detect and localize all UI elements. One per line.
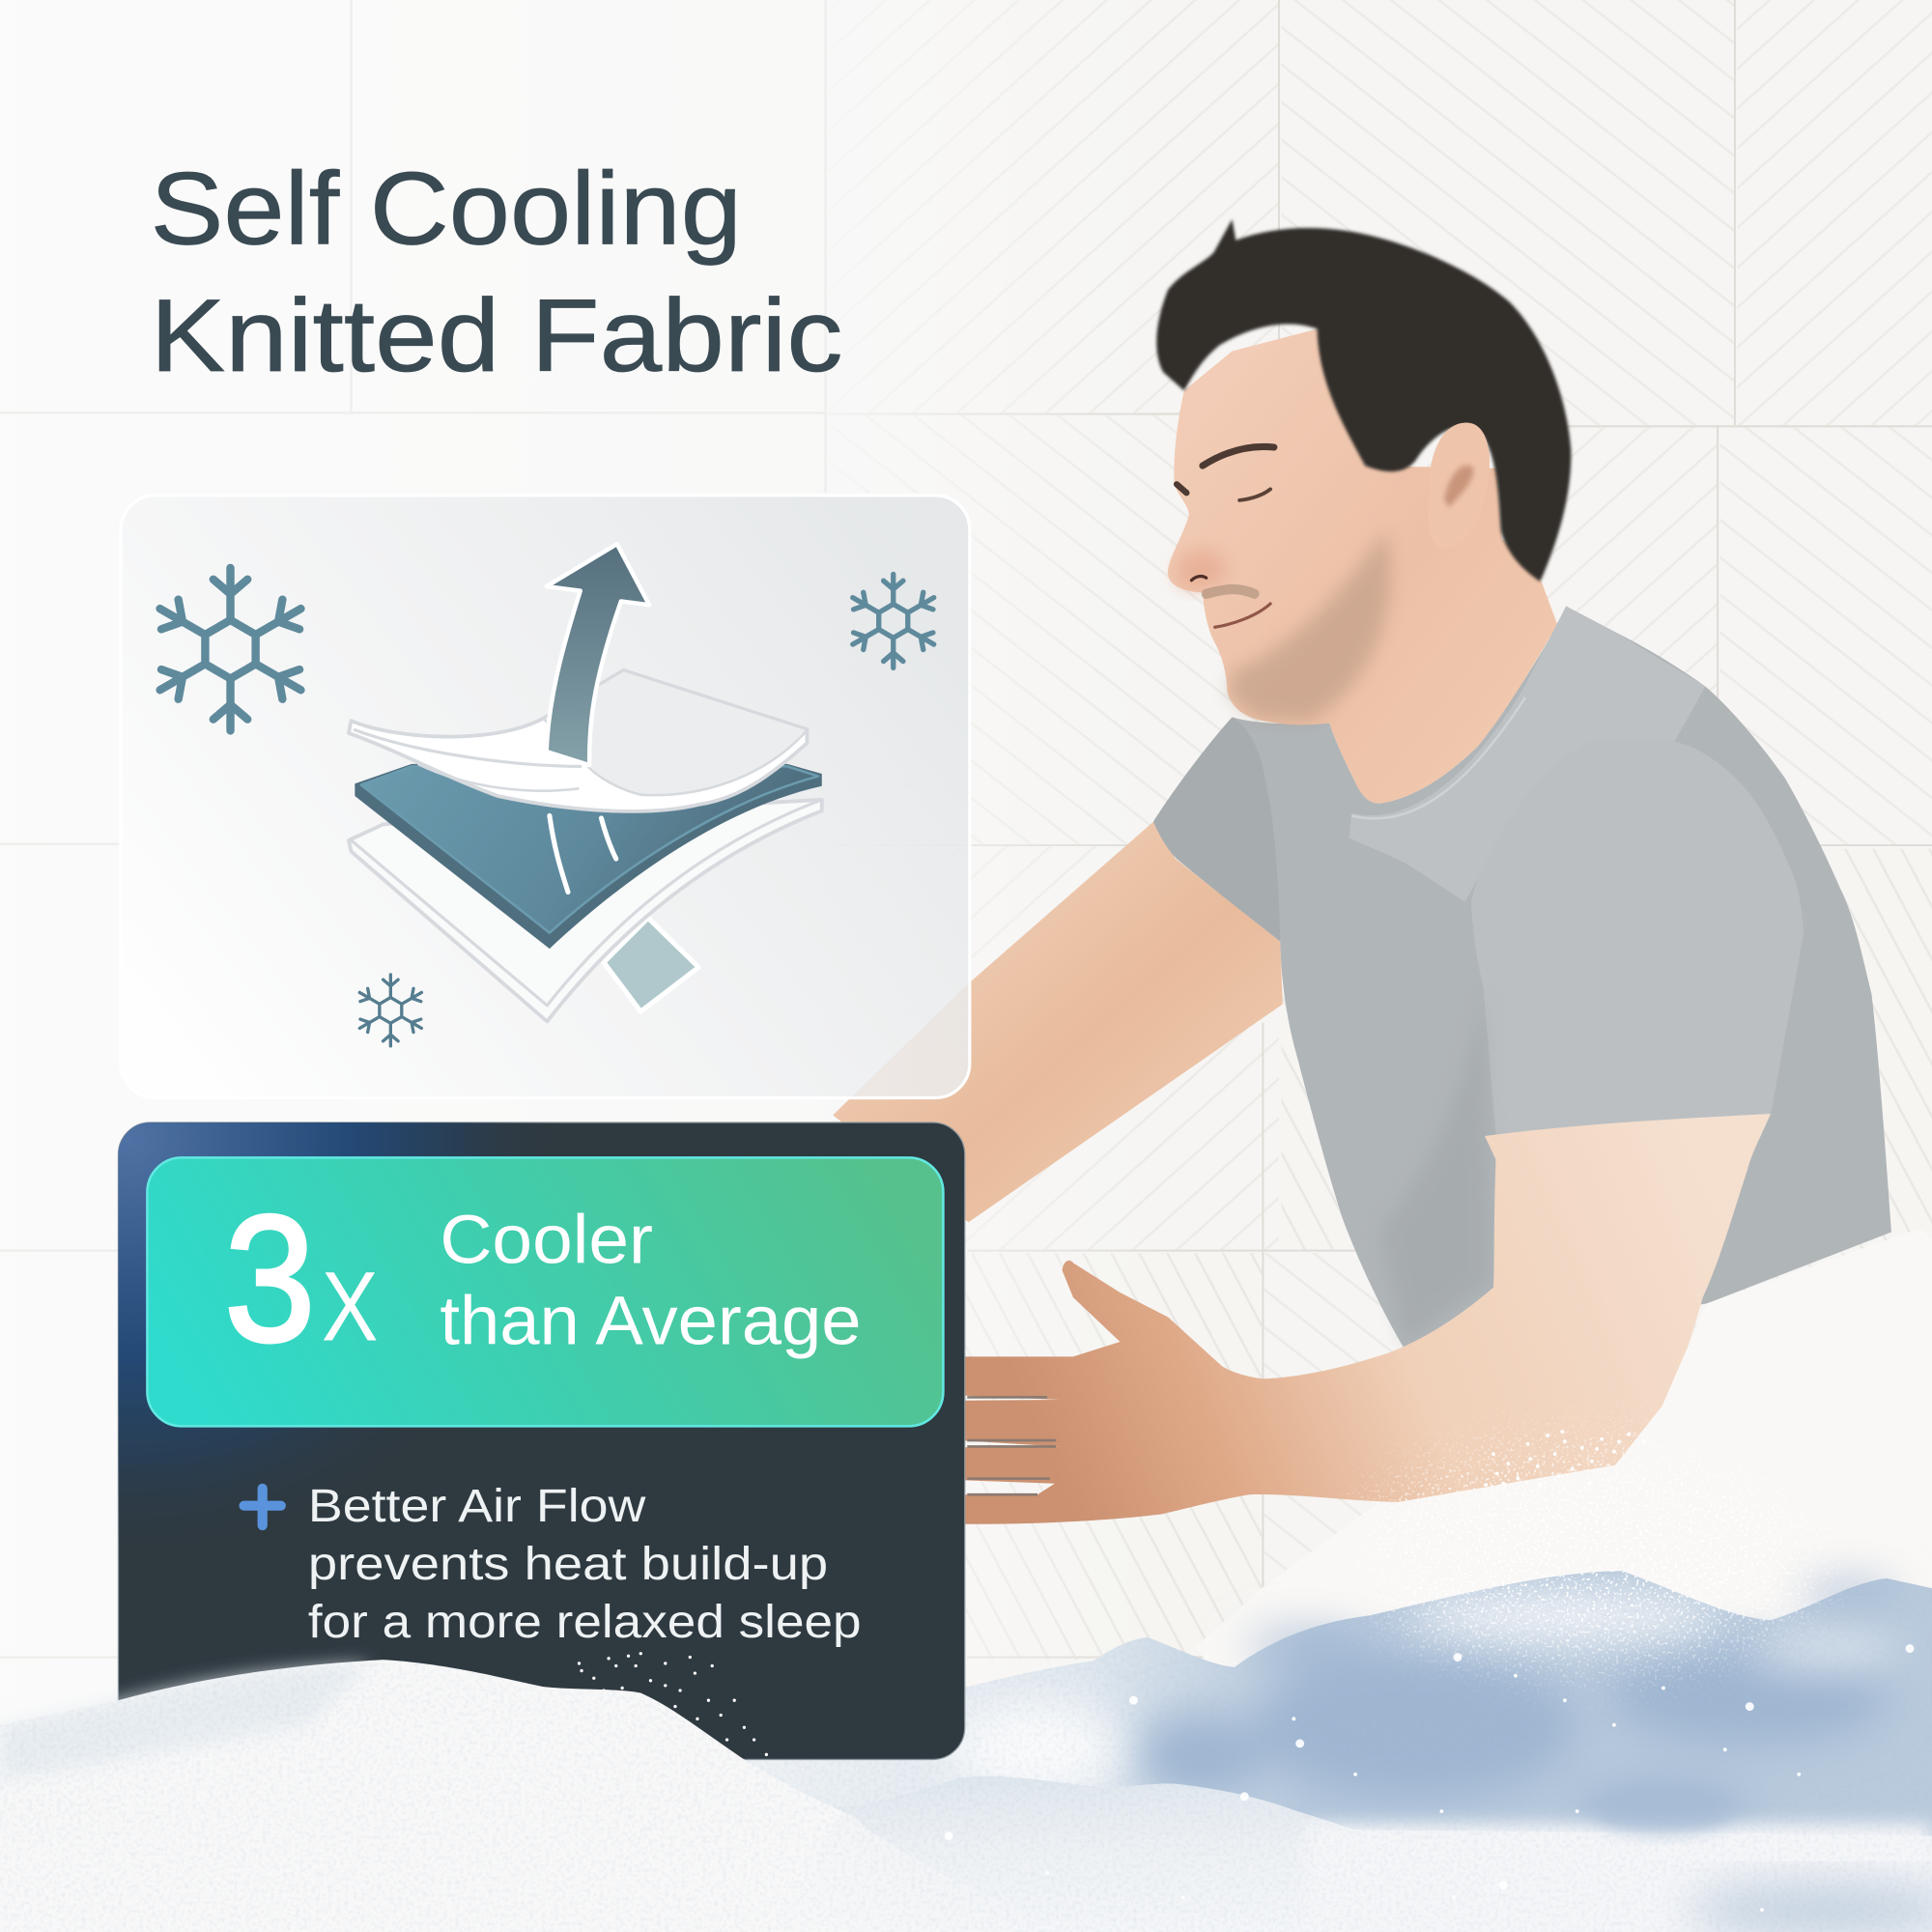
t-shirt body xyxy=(1153,607,1891,1350)
near arm and hand xyxy=(904,1114,1771,1524)
sparkle flakes xyxy=(949,1649,1910,1886)
stat number xyxy=(224,1179,379,1379)
panel: 3x cooler dark card xyxy=(118,1122,965,1759)
blue snow layer xyxy=(690,1571,1932,1932)
finger creases xyxy=(967,1397,1056,1494)
face and neck xyxy=(1168,329,1557,804)
light tab xyxy=(604,918,698,1011)
photo: sleeping man xyxy=(690,219,1932,1932)
stat number: 3 xyxy=(224,1179,316,1379)
stat number: X xyxy=(322,1252,379,1362)
pillow xyxy=(1195,1229,1932,1694)
snow foreground xyxy=(0,1432,1932,1932)
eye, brow, nostril and mouth xyxy=(1177,446,1274,627)
ear xyxy=(1428,423,1490,549)
middle snow drift xyxy=(788,1776,1932,1932)
title xyxy=(151,151,842,393)
icon: medium snowflake xyxy=(848,574,939,668)
near sleeve xyxy=(1471,742,1804,1136)
body shadow by arm xyxy=(1380,985,1490,1343)
top sheet xyxy=(349,670,807,811)
title: Self Cooling xyxy=(151,151,742,267)
icon: small snowflake xyxy=(355,975,425,1046)
illustration: fabric layers xyxy=(349,544,822,1021)
title: Knitted Fabric xyxy=(151,277,842,393)
white slashes xyxy=(550,815,616,892)
snow grain xyxy=(0,1604,1932,1932)
far arm xyxy=(833,822,1283,1222)
snow spray on card xyxy=(579,1654,766,1754)
snow particles xyxy=(1355,1448,1824,1658)
stubble shadow xyxy=(1230,529,1390,721)
far sleeve xyxy=(1153,717,1280,941)
stat label: Cooler xyxy=(440,1201,653,1278)
snow highlights xyxy=(949,1595,1897,1799)
blue shadows xyxy=(1133,1583,1897,1841)
panel: fabric layers glass card xyxy=(121,496,970,1097)
stat label xyxy=(440,1201,862,1360)
benefit text: prevents heat build-up xyxy=(308,1538,828,1590)
hair xyxy=(1156,219,1571,582)
arrow xyxy=(547,544,649,765)
benefit text xyxy=(308,1480,862,1648)
benefit text: Better Air Flow xyxy=(308,1480,646,1532)
bottom layer xyxy=(349,800,822,1021)
stat card xyxy=(147,1157,943,1426)
shoulder and collar xyxy=(1350,607,1705,902)
white snow mound xyxy=(0,1660,842,1932)
teal layer xyxy=(355,764,822,949)
benefit text: for a more relaxed sleep xyxy=(308,1596,862,1648)
icon: plus xyxy=(244,1489,281,1525)
icon: large snowflake xyxy=(152,568,309,730)
nose xyxy=(1176,549,1226,589)
stat label: than Average xyxy=(440,1283,862,1360)
